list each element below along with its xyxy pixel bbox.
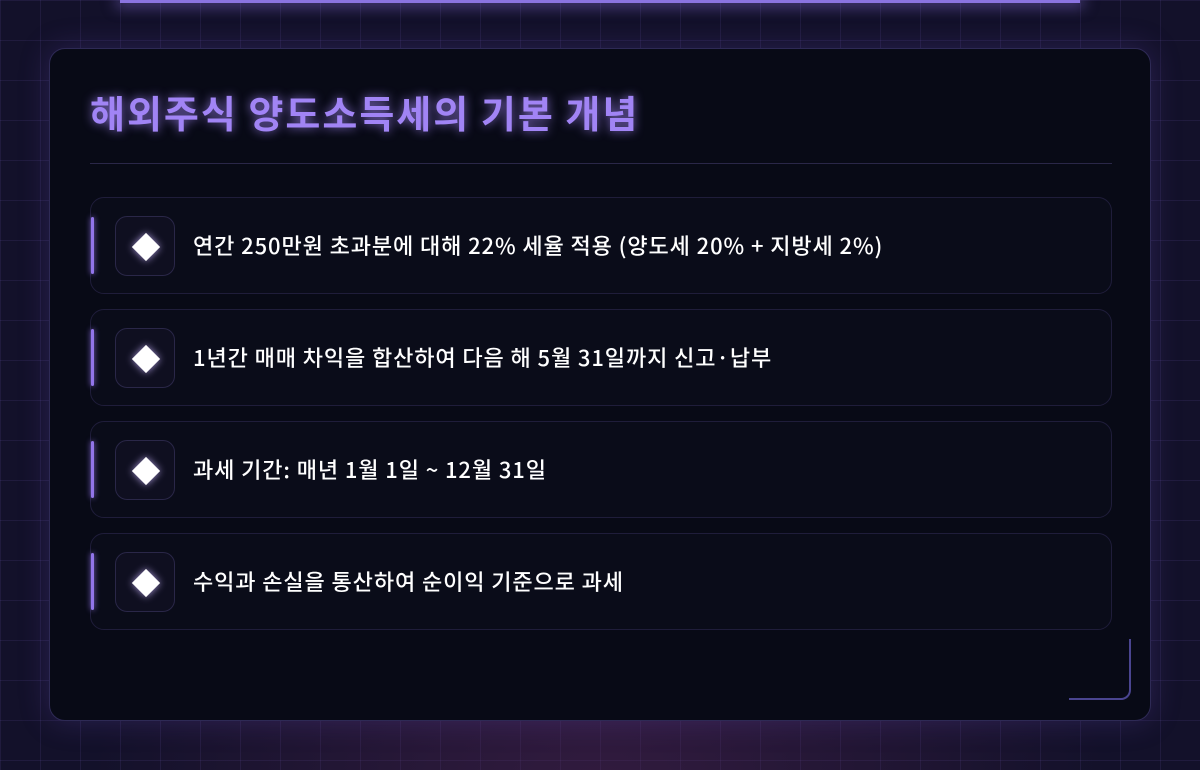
text 2: 1년간 매매 차익을 합산하여 다음 해 5월 31일까지 신고·납부 [193,341,772,373]
text 3: 과세 기간: 매년 1월 1일 ~ 12월 31일 [193,453,547,485]
icon: diamond [115,216,175,276]
text 4: 수익과 손실을 통산하여 순이익 기준으로 과세 [193,565,624,597]
item 2 [90,309,1112,406]
icon: diamond [115,552,175,612]
text 1: 연간 250만원 초과분에 대해 22% 세율 적용 (양도세 20% + 지방세 2%) [193,229,883,261]
item 4 [90,533,1112,630]
icon: diamond [115,328,175,388]
corner accent [1069,639,1131,700]
title: 해외주식 양도소득세의 기본 개념 [90,84,639,139]
icon: diamond [115,440,175,500]
item 3 [90,421,1112,518]
item 1 [90,197,1112,294]
